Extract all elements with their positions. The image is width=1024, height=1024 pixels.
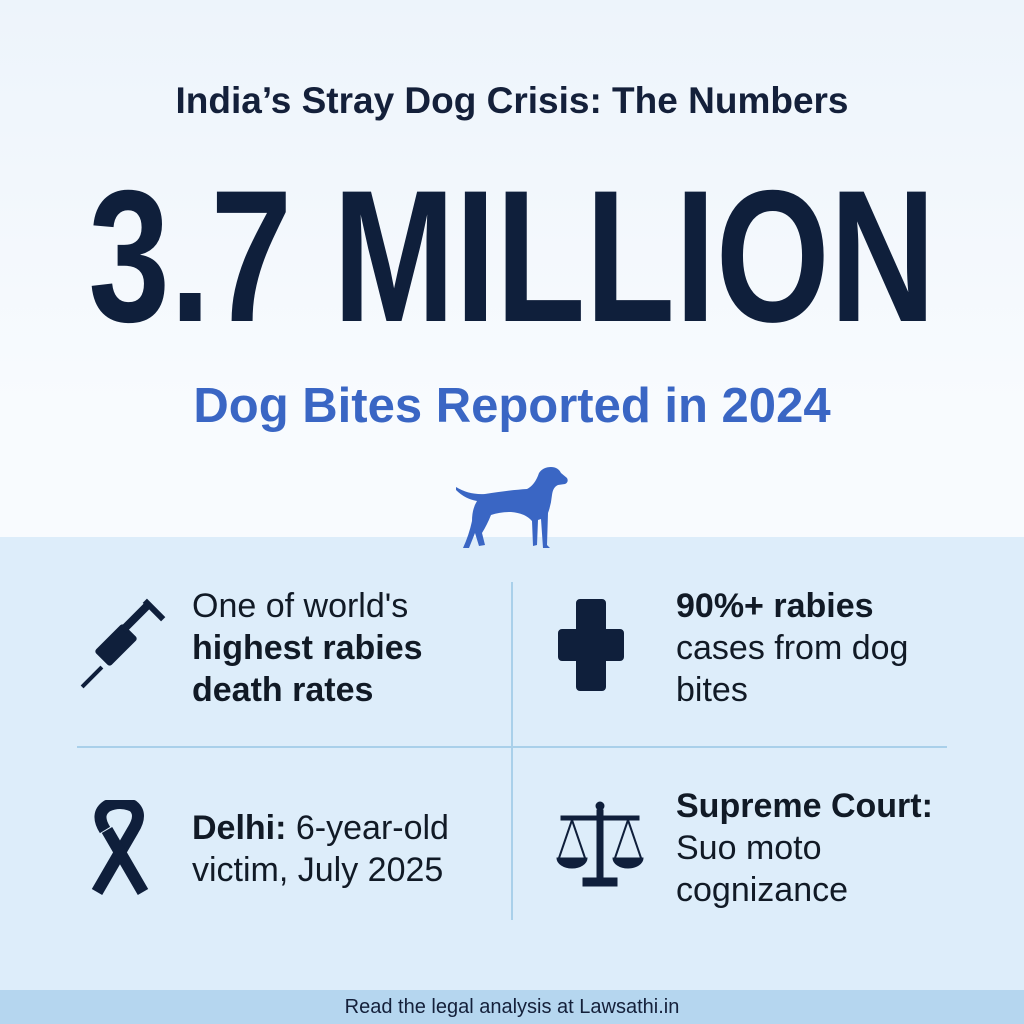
text: highest rabies (192, 629, 423, 667)
text (676, 587, 908, 709)
headline number: 3.7 MILLION (88, 151, 936, 361)
text: cases from dog (676, 629, 908, 667)
text: cognizance (676, 871, 848, 909)
icon: syringe (80, 598, 166, 688)
footer: Read the legal analysis at Lawsathi.in (345, 996, 679, 1018)
text (192, 587, 423, 709)
cell: Delhi victim (92, 800, 449, 895)
text (676, 787, 933, 909)
text: Suo moto (676, 829, 822, 867)
text: bites (676, 671, 748, 709)
title: India’s Stray Dog Crisis: The Numbers (175, 80, 848, 121)
icon: dog (456, 467, 568, 548)
subtitle: Dog Bites Reported in 2024 (193, 379, 831, 433)
text: One of world's (192, 587, 408, 625)
text (192, 809, 449, 889)
text: victim, July 2025 (192, 851, 443, 889)
icon: medical cross (558, 599, 624, 691)
lower panel (0, 537, 1024, 990)
footer (0, 990, 1024, 1024)
text: Supreme Court: (676, 787, 933, 825)
cell: rabies death rates (80, 587, 423, 709)
icon: scales (556, 802, 644, 886)
cell: Supreme Court (556, 787, 933, 909)
cell: 90% rabies (558, 587, 908, 709)
text: Delhi: 6-year-old (192, 809, 449, 847)
text: death rates (192, 671, 373, 709)
icon: ribbon (92, 800, 148, 895)
text: 90%+ rabies (676, 587, 874, 625)
